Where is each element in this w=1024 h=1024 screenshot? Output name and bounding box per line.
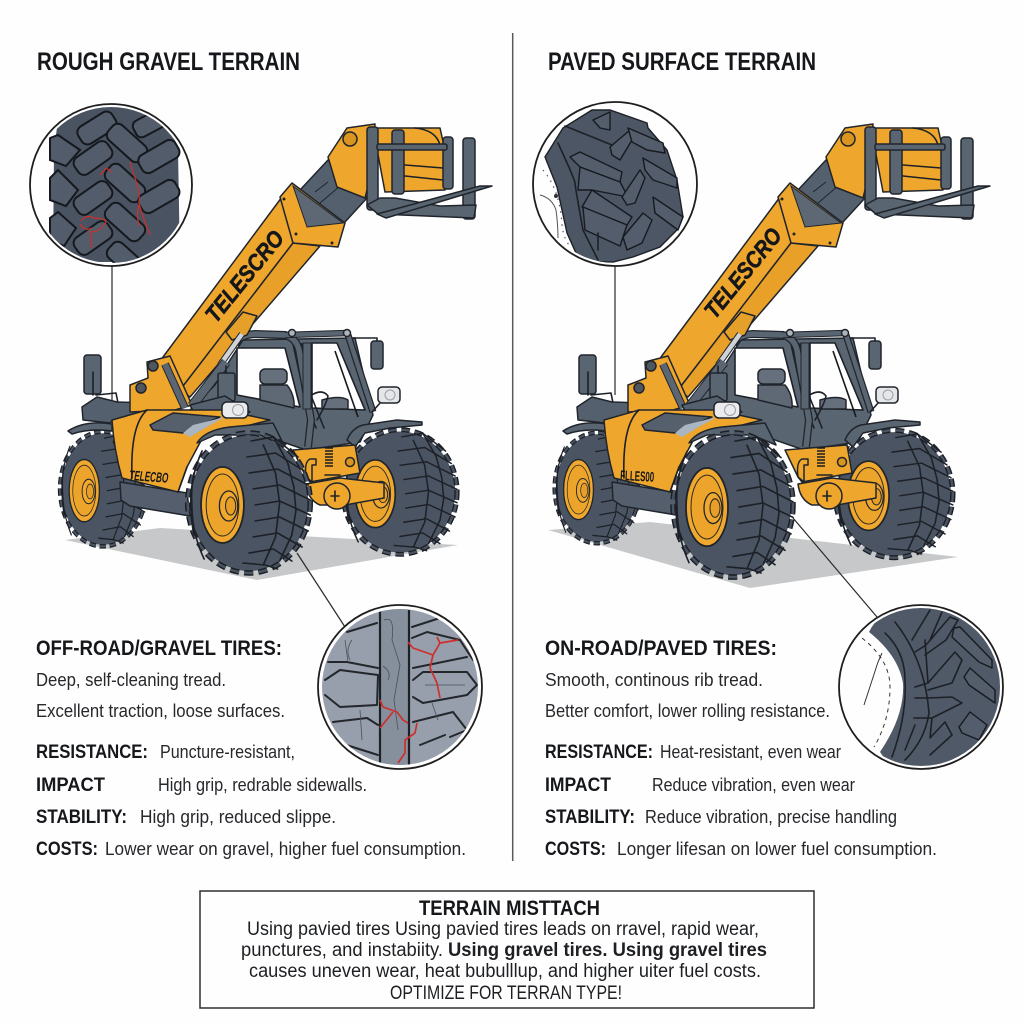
resistance row: RESISTANCE: xyxy=(545,741,653,763)
costs row: COSTS: xyxy=(545,838,606,860)
leader line: gravel tire to lower close-up xyxy=(297,553,345,627)
boom brand text: TELESCRO xyxy=(200,225,289,327)
resistance row: Heat-resistant, even wear xyxy=(660,741,841,762)
front tire xyxy=(673,433,793,577)
description: Smooth, continous rib tread. xyxy=(545,669,763,690)
section heading: OFF-ROAD/GRAVEL TIRES: xyxy=(36,637,282,660)
callout line 4: OPTIMIZE FOR TERRAN TYPE! xyxy=(390,983,622,1004)
impact row: High grip, redrable sidewalls. xyxy=(158,774,367,795)
leader line to top close-up xyxy=(614,265,616,395)
cab xyxy=(190,330,422,450)
costs row: COSTS: xyxy=(36,838,98,860)
resistance row: RESISTANCE: xyxy=(36,741,148,763)
impact row: Reduce vibration, even wear xyxy=(652,774,855,795)
heading: paved surface terrain: PAVED SURFACE TERRAIN xyxy=(548,48,816,76)
heading: rough gravel terrain: ROUGH GRAVEL TERRAIN xyxy=(37,48,300,76)
callout title: TERRAIN MISTTACH xyxy=(419,897,600,920)
cab xyxy=(688,330,920,450)
close-up: gravel tread with cracks xyxy=(30,104,192,283)
callout line 2 xyxy=(241,940,767,961)
body brand text: FLLES00 xyxy=(620,467,655,485)
leader line to top close-up xyxy=(111,265,113,400)
rear deck and mirror xyxy=(68,355,150,434)
resistance row xyxy=(545,741,841,763)
impact row xyxy=(36,774,367,796)
text block: gravel tires xyxy=(36,637,466,860)
description: Excellent traction, loose surfaces. xyxy=(36,700,285,721)
rear tire xyxy=(554,433,640,543)
resistance row: Puncture-resistant, xyxy=(160,741,295,762)
center divider xyxy=(512,33,514,861)
callout line 3: causes uneven wear, heat bubulllup, and higher uiter fuel costs. xyxy=(249,961,761,982)
section heading: ON-ROAD/PAVED TIRES: xyxy=(545,637,777,660)
callout line 2: Using gravel tires. Using gravel tires xyxy=(448,940,767,961)
panel: gravel telehandler illustration xyxy=(60,124,492,580)
resistance row xyxy=(36,741,295,763)
chassis body xyxy=(112,366,384,516)
stability row: STABILITY: xyxy=(36,806,127,828)
text block: paved tires xyxy=(545,637,937,860)
leader line: paved tire to lower close-up xyxy=(793,518,877,617)
far tire xyxy=(835,430,953,558)
chassis body xyxy=(604,366,876,516)
costs row: Lower wear on gravel, higher fuel consumption. xyxy=(105,838,466,859)
stability row xyxy=(545,806,897,828)
close-up: paved tire tread xyxy=(533,102,697,266)
stability row: Reduce vibration, precise handling xyxy=(645,806,897,827)
telescopic boom xyxy=(130,124,492,412)
rear tire xyxy=(60,432,146,546)
callout: terrain mismatch xyxy=(200,891,814,1008)
close-up: paved rib tread xyxy=(838,604,1004,770)
callout line 2: punctures, and instabiity. xyxy=(241,940,443,961)
impact row xyxy=(545,774,855,796)
callout line 1: Using pavied tires Using pavied tires leads on rravel, rapid wear, xyxy=(247,919,759,940)
rear deck and mirror xyxy=(563,355,645,434)
stability row xyxy=(36,806,336,828)
description: Deep, self-cleaning tread. xyxy=(36,669,226,690)
body brand text: TELECBO xyxy=(129,467,169,486)
close-up: gravel tread surface with red cracks xyxy=(318,605,482,769)
stability row: STABILITY: xyxy=(545,806,635,828)
stability row: High grip, reduced slippe. xyxy=(140,806,336,827)
impact row: IMPACT xyxy=(545,774,611,796)
panel: paved telehandler illustration xyxy=(548,124,990,588)
boom brand text: TELESCRO xyxy=(699,223,787,323)
impact row: IMPACT xyxy=(36,774,105,796)
far tire xyxy=(343,430,457,554)
ground shadow xyxy=(65,528,458,580)
telescopic boom xyxy=(628,124,990,412)
costs row: Longer lifesan on lower fuel consumption. xyxy=(617,838,937,859)
front tire xyxy=(188,433,310,573)
ground shadow xyxy=(548,522,958,588)
description: Better comfort, lower rolling resistance. xyxy=(545,700,830,721)
